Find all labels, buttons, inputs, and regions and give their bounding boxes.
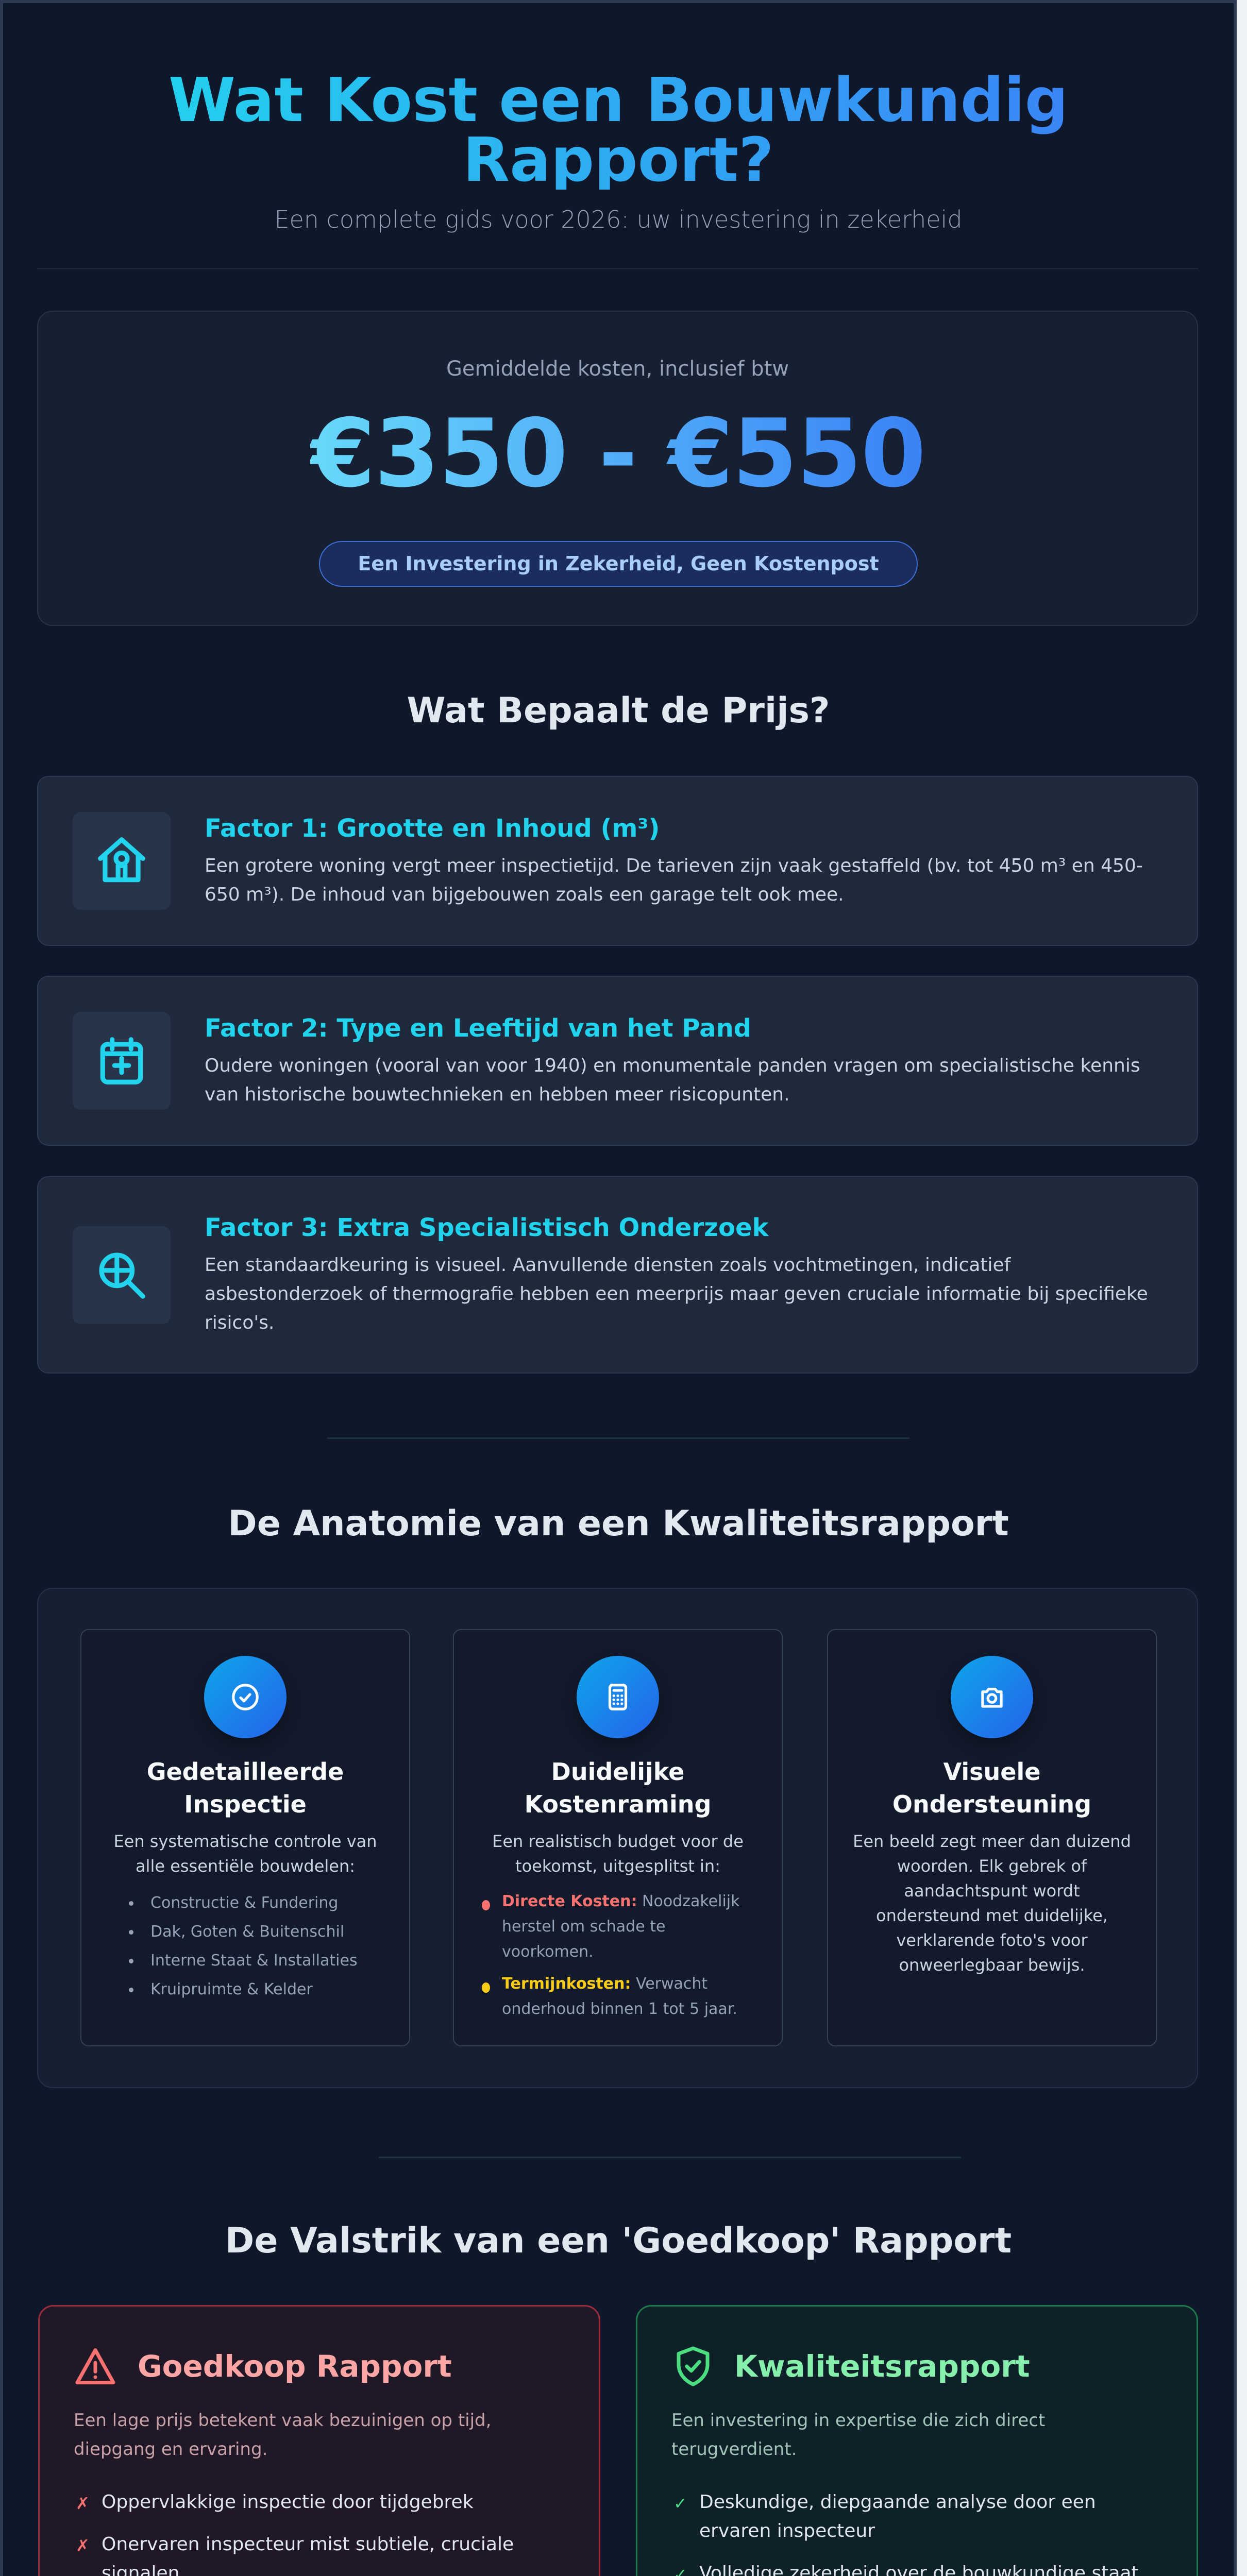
panel: factor 1: Factor 1: Grootte en Inhoud (m³) [205,814,660,843]
card: kostenraming: Termijnkosten: Verwacht onderhoud binnen 1 tot 5 jaar. [502,1975,737,2018]
panel: factor 1 [37,776,1198,946]
panel: goedkoop: Een lage prijs betekent vaak bezuinigen op tijd, diepgang en ervaring. [74,2410,491,2460]
panel: factor 3: Factor 3: Extra Specialistisch Onderzoek [205,1213,768,1242]
icon: check circle [204,1656,287,1738]
card: kostenraming: Directe Kosten: Noodzakelijk herstel om schade te voorkomen. [502,1892,739,1961]
icon: calendar [73,1012,171,1110]
panel: factor 3: Een standaardkeuring is visueel. Aanvullende diensten zoals vochtmetingen, indicatief asbestonderzoek of thermografie hebben een meerprijs maar geven cruciale informatie bij specifieke risico's. [205,1255,1148,1333]
card: inspectie: Inspectie [184,1790,307,1818]
card: visueel: Visuele [943,1758,1040,1786]
icon: house [73,812,171,910]
pill: Een Investering in Zekerheid, Geen Kostenpost [358,552,879,575]
panel: goedkoop [38,2305,600,2576]
card: inspectie: Interne Staat & Installaties [150,1952,358,1970]
icon: calculator [577,1656,659,1738]
icon: magnifier [73,1226,171,1324]
heading: valstrik: De Valstrik van een 'Goedkoop' Rapport [225,2221,1012,2261]
icon: camera [951,1656,1033,1738]
card: inspectie: Kruipruimte & Kelder [150,1980,313,1998]
header: goedkoop: Goedkoop Rapport [138,2349,452,2384]
panel: price [37,311,1198,626]
card: inspectie: Een systematische controle van alle essentiële bouwdelen: [113,1832,377,1876]
panel: factor 1: Een grotere woning vergt meer inspectietijd. De tarieven zijn vaak gestaffeld (bv. tot 450 m³ en 450-650 m³). De inhoud van bijgebouwen zoals een garage telt ook mee. [205,855,1143,905]
price range: €350 - €550 [310,399,925,508]
card: kostenraming: Kostenraming [525,1790,711,1818]
panel: goedkoop: ✗ [76,2536,90,2555]
panel: factor 2: Factor 2: Type en Leeftijd van het Pand [205,1014,751,1043]
title [168,64,1068,195]
panel: factor 3 [37,1176,1198,1374]
card: inspectie: Dak, Goten & Buitenschil [150,1923,344,1941]
panel: kwaliteit: Deskundige, diepgaande analyse door een ervaren inspecteur [699,2492,1096,2541]
card: visueel [827,1629,1157,2046]
heading: anatomy: De Anatomie van een Kwaliteitsrapport [228,1503,1009,1544]
heading: factors: Wat Bepaalt de Prijs? [407,690,830,731]
card: visueel: Ondersteuning [892,1790,1091,1818]
panel: kwaliteit: ✓ [673,2494,687,2513]
card: inspectie: Gedetailleerde [147,1758,344,1786]
panel: goedkoop: Oppervlakkige inspectie door tijdgebrek [102,2492,474,2513]
pill [319,541,918,587]
panel: kwaliteit [636,2305,1198,2576]
price label: Gemiddelde kosten, inclusief btw [446,357,789,381]
panel: kwaliteit: Een investering in expertise die zich direct terugverdient. [671,2410,1045,2460]
title: Wat Kost een Bouwkundig [168,64,1068,135]
panel: anatomy [37,1588,1198,2088]
card: kostenraming [453,1629,783,2046]
card: inspectie: Constructie & Fundering [150,1894,338,1912]
card: kostenraming: Duidelijke [551,1758,684,1786]
card: kostenraming: Een realistisch budget voor de toekomst, uitgesplitst in: [492,1832,744,1876]
title: Rapport? [463,124,774,195]
subtitle: Een complete gids voor 2026: uw investering in zekerheid [274,206,963,233]
panel: goedkoop: ✗ [76,2494,90,2513]
panel: factor 2: Oudere woningen (vooral van voor 1940) en monumentale panden vragen om specialistische kennis van historische bouwtechnieken en hebben meer risicopunten. [205,1055,1140,1105]
card: visueel: Een beeld zegt meer dan duizend woorden. Elk gebrek of aandachtspunt wordt ondersteund met duidelijke, verklarende foto's voor onweerlegbaar bewijs. [853,1832,1131,1975]
header: kwaliteit: Kwaliteitsrapport [734,2349,1030,2384]
card: inspectie [80,1629,410,2046]
panel: factor 2 [37,976,1198,1146]
